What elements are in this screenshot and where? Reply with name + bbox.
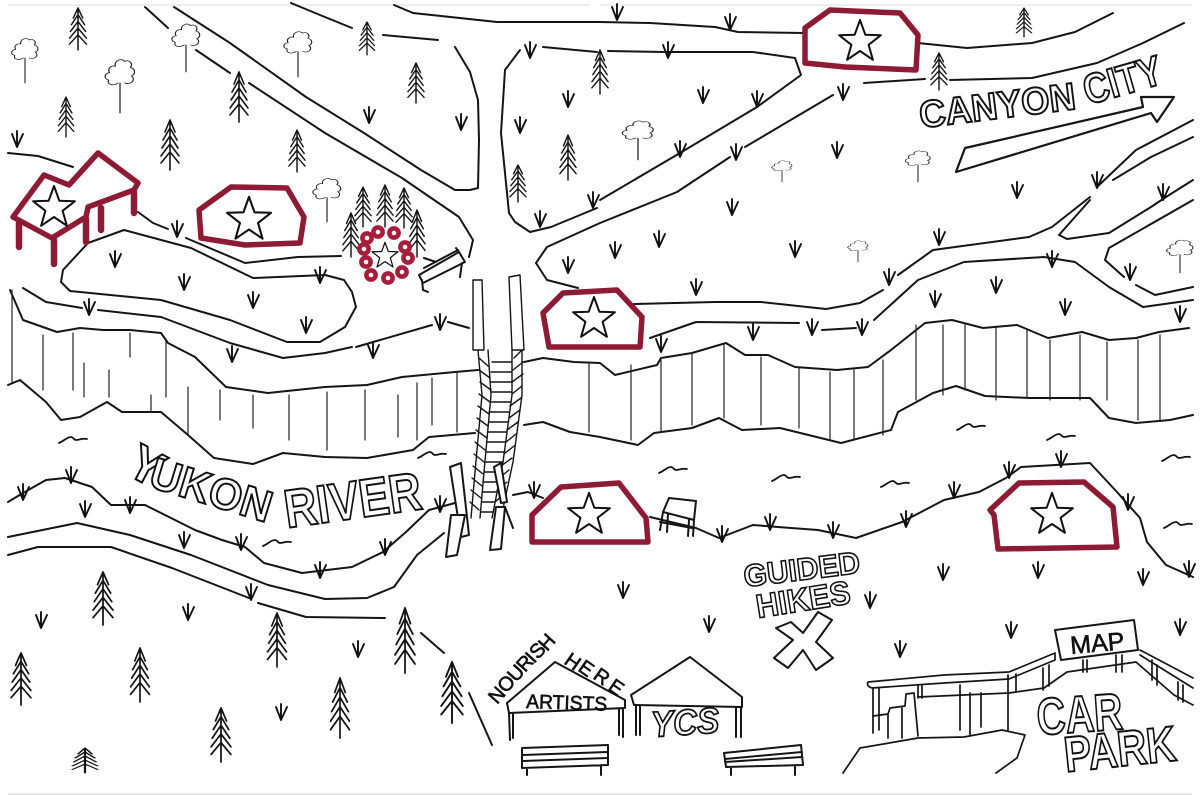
site building with star: south of bridge — [532, 483, 648, 542]
river ripples — [59, 424, 1192, 546]
label: Guided Hikes with X marker — [742, 545, 862, 670]
tent: Nourish Here Artists: NOURISH — [484, 630, 560, 708]
stone circle site with star — [359, 227, 413, 283]
label: Guided Hikes with X marker: HIKES — [753, 574, 853, 625]
tent: Nourish Here Artists: HERE — [560, 649, 628, 701]
bench: south-west of tent — [522, 745, 608, 775]
tent: Nourish Here Artists: ARTISTS — [526, 691, 608, 716]
bench: south-east of tent — [724, 745, 803, 775]
sign: Map: MAP — [1069, 627, 1126, 660]
tent: YCS: YCS — [650, 699, 720, 745]
left cliff face — [8, 290, 478, 464]
river bank south — [8, 463, 1193, 577]
label: Yukon River: RIVER — [280, 461, 425, 540]
label: Canyon City: CITY — [1078, 46, 1167, 114]
deciduous trees — [12, 24, 1193, 273]
bridge stairs down the cliff — [446, 275, 524, 557]
car park structure and railing — [843, 650, 1193, 773]
grove of conifers — [343, 185, 425, 257]
right cliff face — [524, 320, 1193, 445]
tent: YCS — [631, 657, 742, 745]
label: Guided Hikes with X marker: GUIDED — [742, 545, 862, 594]
picnic bench by grove — [419, 248, 465, 292]
label: Yukon River: UKON — [144, 449, 278, 532]
label: Yukon River: Y — [119, 433, 175, 498]
site building with star: north — [805, 10, 918, 70]
tent: Nourish Here Artists — [484, 630, 628, 740]
small bench near river — [660, 498, 696, 536]
label: Canyon City — [917, 46, 1167, 137]
arrow to Canyon City — [956, 97, 1174, 172]
label: Yukon River — [119, 433, 425, 540]
site building with star: south-east — [990, 482, 1117, 549]
label: Canyon City: CANYON — [917, 76, 1078, 137]
site building with star: north-west — [199, 187, 304, 245]
label: Car Park: CAR — [1035, 683, 1125, 747]
double-roof building with star — [13, 153, 138, 264]
label: Car Park — [1035, 683, 1179, 783]
site building with star: centre — [543, 290, 642, 347]
sign: Map — [1055, 620, 1138, 660]
